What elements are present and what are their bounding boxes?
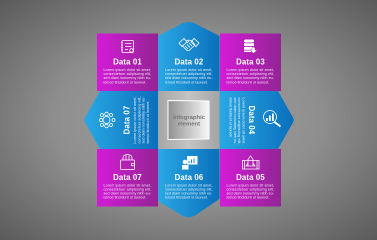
text: data 05 body: ismod tincidunt ut laoreet. xyxy=(226,196,270,200)
text: data 07 bottom body: consectetuer adipiscing elit, xyxy=(104,188,151,192)
icon: checklist xyxy=(121,40,134,52)
heading: data 03: Data 03 xyxy=(236,58,265,66)
panel: data 02 top arrow xyxy=(158,22,220,91)
panel: data 01 xyxy=(97,34,158,91)
text: data 02 body: ismod tincidunt ut laoreet. xyxy=(165,80,208,84)
text: data 03 body: Lorem ipsum dolor sit amet, xyxy=(226,68,274,72)
heading: data 01: Data 01 xyxy=(113,58,142,66)
text: data 04 rotated body xyxy=(228,98,246,145)
panel: data 07 left arrow xyxy=(84,91,158,149)
heading: data 06: Data 06 xyxy=(175,173,204,182)
text: data 02 body: consectetuer adipiscing elit, xyxy=(165,72,212,76)
text: data 07 rotated body: consectetuer adipiscing elit, xyxy=(137,96,141,144)
text: data 07 bottom body: Lorem ipsum dolor sit amet, xyxy=(104,184,151,188)
text: data 01 body: Lorem ipsum dolor sit amet, xyxy=(104,68,151,72)
center square xyxy=(168,100,209,140)
text: data 06 body: sed diam nonummy nibh eu- xyxy=(165,192,213,196)
text: data 06 body: consectetuer adipiscing elit, xyxy=(165,188,212,192)
heading: data 02: Data 02 xyxy=(175,58,204,66)
center label second line: element xyxy=(178,122,200,128)
text: data 07 rotated body: Lorem ipsum dolor sit amet, xyxy=(133,96,137,144)
text: data 07 bottom body xyxy=(104,184,152,200)
panel: data 06 bottom arrow xyxy=(158,149,220,217)
heading: data 07 bottom: Data 07 xyxy=(113,173,142,182)
text: data 05 body: sed diam nonummy nibh eu- xyxy=(226,192,275,196)
text: data 07 rotated body: ismod tincidunt ut laoreet. xyxy=(146,100,150,144)
panel: data 03 xyxy=(220,34,281,91)
text: data 01 body xyxy=(104,68,152,84)
text: data 01 body: sed diam nonummy nibh eu- xyxy=(104,76,152,80)
text: data 02 body: sed diam nonummy nibh eu- xyxy=(165,76,213,80)
text: data 03 body: ismod tincidunt ut laoreet. xyxy=(226,80,270,84)
text: data 05 body: Lorem ipsum dolor sit amet, xyxy=(226,184,274,188)
text: data 07 rotated body: sed diam nonummy nibh eu- xyxy=(142,96,146,144)
panel: data 07 bottom left xyxy=(97,149,158,206)
icon: database download xyxy=(244,40,257,54)
text: data 03 body: consectetuer adipiscing elit, xyxy=(226,72,274,76)
text: data 05 body xyxy=(226,184,275,200)
text: data 06 body xyxy=(165,184,213,200)
text: data 03 body xyxy=(226,68,275,84)
text: data 01 body: ismod tincidunt ut laoreet. xyxy=(104,80,146,84)
panel: center xyxy=(158,91,220,149)
heading: data 04 rotated: Data 04 xyxy=(247,106,256,135)
center label: Infographic xyxy=(173,115,206,121)
heading: data 07 rotated: Data 07 xyxy=(122,106,132,134)
text: data 07 rotated body xyxy=(133,96,150,144)
text: data 01 body: consectetuer adipiscing elit, xyxy=(104,72,151,76)
icon: rocket blueprint xyxy=(242,156,259,169)
icon: chart and person xyxy=(182,156,198,170)
text: data 07 bottom body: ismod tincidunt ut laoreet. xyxy=(104,196,146,200)
text: data 04 rotated body: consectetuer adipiscing elit, xyxy=(237,98,241,144)
text: data 04 rotated body: sed diam nonummy nibh eu- xyxy=(233,98,237,145)
text: data 06 body: Lorem ipsum dolor sit amet, xyxy=(165,184,212,188)
text: data 07 bottom body: sed diam nonummy nibh eu- xyxy=(104,192,152,196)
text: data 02 body: Lorem ipsum dolor sit amet, xyxy=(165,68,212,72)
text: data 05 body: consectetuer adipiscing elit, xyxy=(226,188,274,192)
heading: data 05: Data 05 xyxy=(236,173,265,182)
panel: data 05 xyxy=(220,149,281,206)
text: data 06 body: ismod tincidunt ut laoreet. xyxy=(165,196,208,200)
text: data 02 body xyxy=(165,68,213,84)
text: data 04 rotated body: ismod tincidunt ut laoreet. xyxy=(228,98,232,138)
panel: data 04 right arrow xyxy=(220,91,294,149)
icon: handshake xyxy=(179,38,199,50)
icon: magnifier chart xyxy=(264,110,280,126)
text: data 03 body: sed diam nonummy nibh eu- xyxy=(226,76,275,80)
icon: wallet xyxy=(120,154,134,170)
text: data 04 rotated body: Lorem ipsum dolor sit amet, xyxy=(242,98,246,144)
icon: network xyxy=(99,112,115,128)
